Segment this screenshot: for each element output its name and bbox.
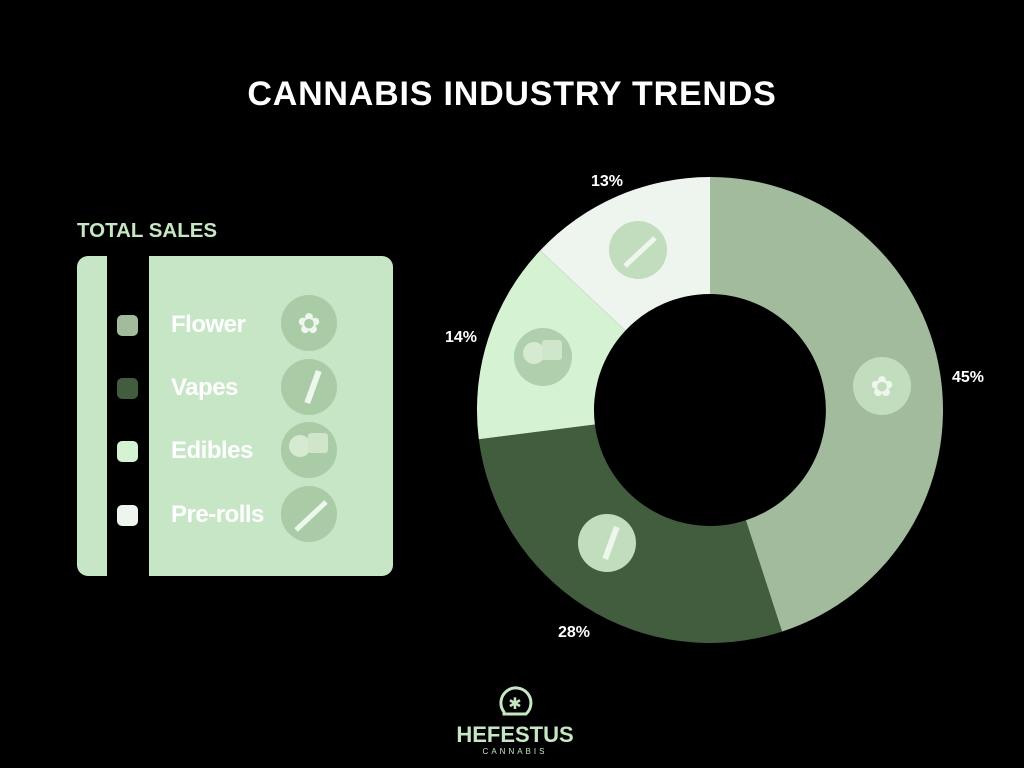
icon: flower segment: ✿	[870, 371, 894, 402]
legend swatch: edibles	[117, 441, 138, 462]
icon: flower legend: ✿	[297, 308, 321, 339]
icon: pre-rolls segment	[609, 221, 667, 279]
label: 13%: 13%	[591, 173, 623, 190]
legend label: pre-rolls: Pre-rolls	[171, 501, 264, 528]
icon: vapes legend	[281, 359, 337, 415]
icon: pre-rolls legend	[281, 486, 337, 542]
subtitle: total sales: TOTAL SALES	[77, 219, 217, 242]
logo wordmark: HEFESTUS	[456, 722, 574, 747]
segment: flower 45%	[710, 177, 943, 632]
panel: legend	[77, 256, 393, 576]
legend swatch: flower	[117, 315, 138, 336]
legend swatch: pre-rolls	[117, 505, 138, 526]
icon: vapes segment	[578, 514, 636, 572]
segment: pre-rolls 13%	[540, 177, 710, 331]
logo tagline: CANNABIS	[483, 747, 547, 756]
icon: edibles segment	[514, 328, 572, 386]
label: 45%: 45%	[952, 369, 984, 386]
label: 28%: 28%	[558, 624, 590, 641]
legend label: vapes: Vapes	[171, 374, 238, 401]
logo icon: ✱	[508, 696, 522, 713]
label: 14%: 14%	[445, 329, 477, 346]
legend label: edibles: Edibles	[171, 437, 253, 464]
logo icon	[499, 686, 532, 716]
segment: edibles 14%	[477, 250, 625, 439]
segment: vapes 28%	[479, 424, 782, 643]
icon: edibles legend	[281, 422, 337, 478]
title: CANNABIS INDUSTRY TRENDS	[247, 75, 777, 113]
icon: flower segment	[853, 357, 911, 415]
legend swatch: vapes	[117, 378, 138, 399]
logo	[456, 686, 574, 756]
legend label: flower: Flower	[171, 311, 245, 338]
icon: flower legend	[281, 295, 337, 351]
